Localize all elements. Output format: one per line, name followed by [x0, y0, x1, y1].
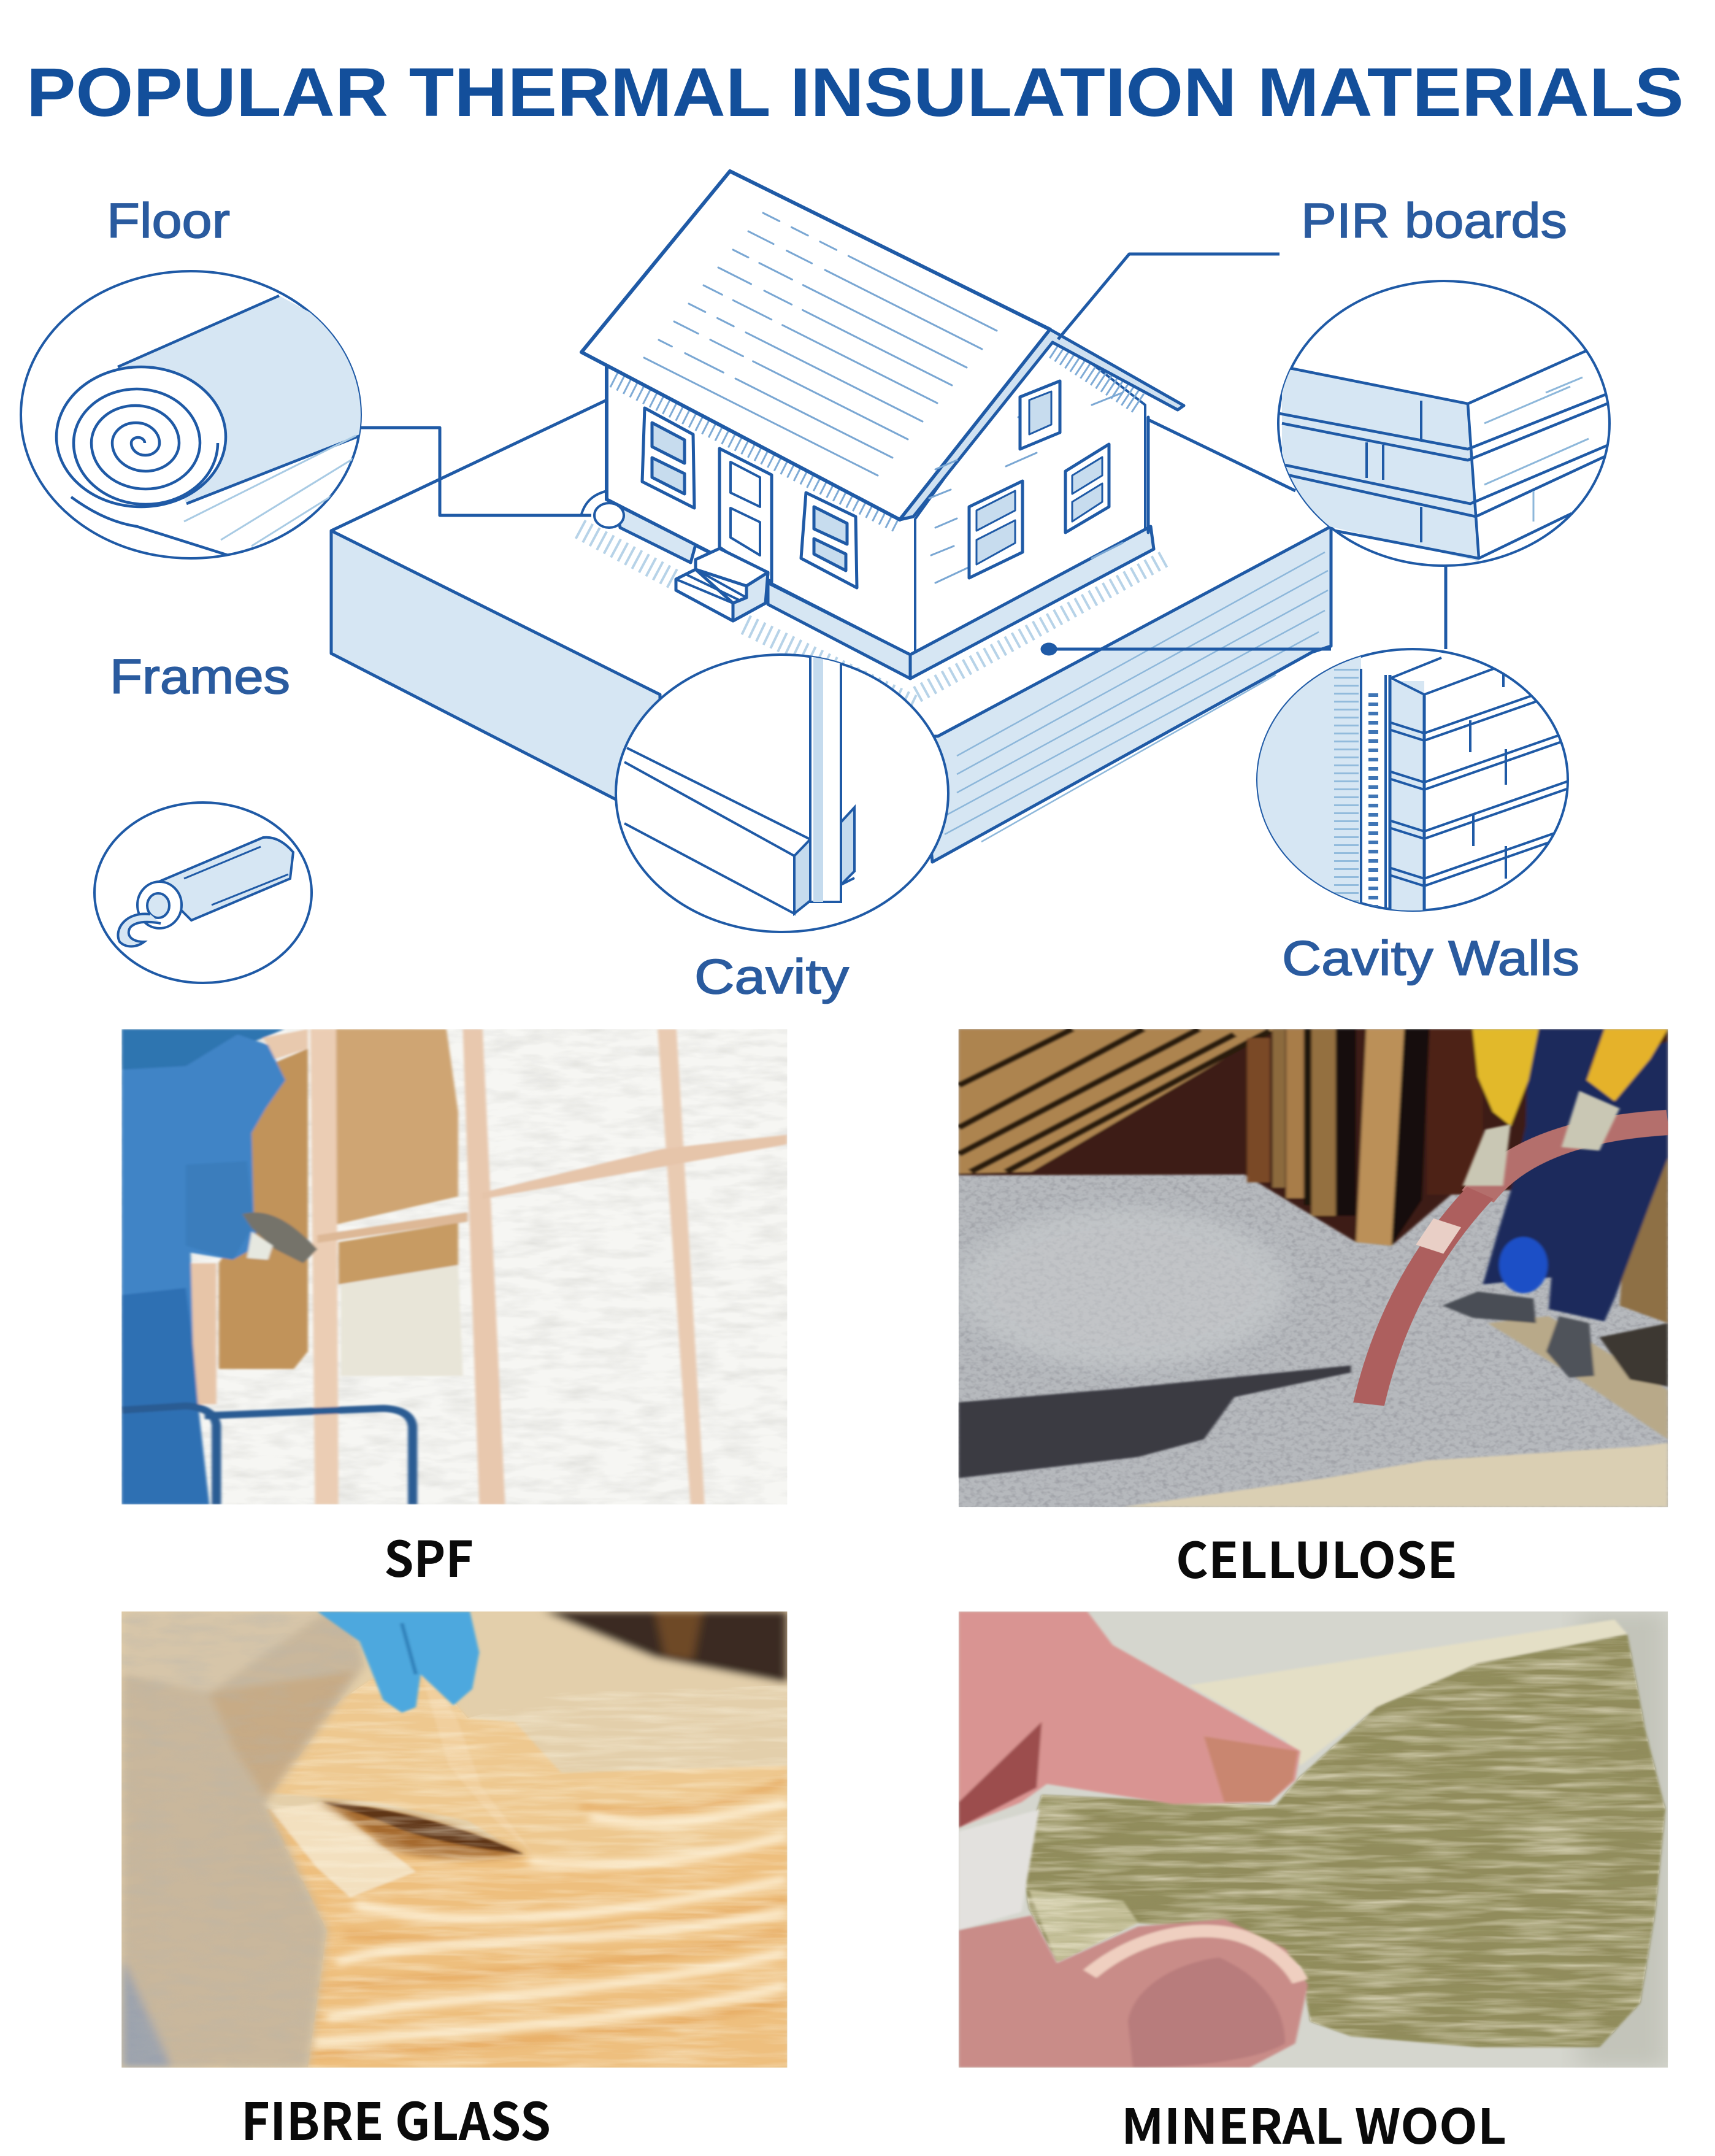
eave hatch [613, 379, 902, 526]
sandy foreground [1123, 1443, 1668, 1507]
dark cable corner [1600, 1323, 1668, 1387]
label: PIR boards: PIR boards [1301, 193, 1567, 248]
light floor wash [956, 1207, 1290, 1369]
dark background corner [543, 1611, 787, 1684]
left white gap [959, 1809, 1039, 1930]
gable fascia [900, 329, 1184, 520]
fibre texture left [121, 1611, 366, 2068]
side wall siding marks [929, 393, 1122, 583]
roof [581, 171, 1050, 520]
worker legs [1483, 1029, 1668, 1322]
fibre texture right [251, 1656, 787, 2068]
unrolled sheet hatch [184, 436, 356, 546]
caption: SPF: SPF [384, 1520, 474, 1592]
connector lines [359, 254, 1446, 654]
spiral end [56, 367, 226, 507]
platform left face [331, 531, 660, 822]
label: Floor: Floor [107, 193, 230, 248]
house [580, 171, 1184, 706]
cavity walls callout [1251, 644, 1570, 914]
window front right [801, 493, 857, 588]
vertical posts [1247, 1038, 1270, 1182]
side wall [915, 331, 1145, 653]
wool fibres [1021, 1634, 1668, 2050]
pale back edge [1189, 1620, 1627, 1766]
wood at right [1620, 1158, 1668, 1323]
label: Cavity Walls: Cavity Walls [1282, 931, 1579, 985]
gloves [1462, 1091, 1620, 1186]
orange and pale layer streaks [313, 1781, 787, 2054]
attic back wall [959, 1029, 1668, 1245]
front wall [607, 366, 915, 653]
blue rail [121, 1406, 413, 1504]
tube end and hook [137, 882, 182, 928]
front wall outline [607, 366, 909, 655]
photo: mineral wool [958, 1611, 1668, 2068]
flap brown shade [317, 1802, 524, 1858]
tube [159, 837, 293, 920]
thumb highlight [1090, 1931, 1300, 1981]
red hose [1368, 1122, 1668, 1404]
platform right face [920, 526, 1331, 862]
thumbnail [1128, 1958, 1285, 2068]
door [719, 449, 772, 582]
pale corner [270, 1802, 416, 1897]
yellow sleeves [1473, 1029, 1538, 1126]
floor roll callout [21, 271, 368, 558]
roof rafters [959, 1029, 1275, 1174]
left fleece face [121, 1611, 364, 2068]
dark gap [322, 1802, 524, 1854]
photo: fibre glass batt [121, 1611, 788, 2068]
wool body [1021, 1634, 1665, 2047]
lower left grey [121, 1956, 172, 2068]
frames tube callout [94, 803, 312, 983]
PIR boards callout [1278, 281, 1610, 566]
caption: CELLULOSE: CELLULOSE [1176, 1522, 1457, 1593]
ground shadow hatch [580, 529, 1165, 706]
lifted flap [251, 1656, 787, 1870]
window front left [642, 408, 694, 508]
cellulose grain [959, 1172, 1668, 1507]
roll body [118, 296, 368, 504]
top surface [467, 1611, 787, 1773]
photo: SPF spray foam [121, 1029, 788, 1504]
black membrane [959, 1365, 1351, 1478]
lower layers [266, 1806, 787, 2068]
thumb [959, 1915, 1308, 2068]
front steps [676, 549, 768, 621]
wood studs [310, 1029, 339, 1504]
caption: FIBRE GLASS: FIBRE GLASS [241, 2081, 551, 2155]
label: Frames: Frames [110, 649, 290, 704]
photo: cellulose attic [958, 1029, 1668, 1507]
boots [1442, 1292, 1536, 1323]
OSB panels [336, 1029, 458, 1225]
cavity callout [616, 650, 948, 932]
title: POPULAR THERMAL INSULATION MATERIALS [26, 54, 1684, 131]
spray gun [242, 1212, 317, 1263]
roof shingle lines [644, 213, 997, 475]
glove [317, 1611, 479, 1712]
gable windows [969, 381, 1109, 578]
label: Cavity: Cavity [694, 949, 849, 1004]
base strips [616, 504, 696, 563]
foam texture [191, 1029, 788, 1504]
caption: MINERAL WOOL: MINERAL WOOL [1121, 2089, 1506, 2156]
worker suit [121, 1029, 285, 1069]
platform base under the house [331, 401, 1331, 862]
top finger [959, 1611, 1300, 1828]
blue knee [1499, 1237, 1548, 1293]
